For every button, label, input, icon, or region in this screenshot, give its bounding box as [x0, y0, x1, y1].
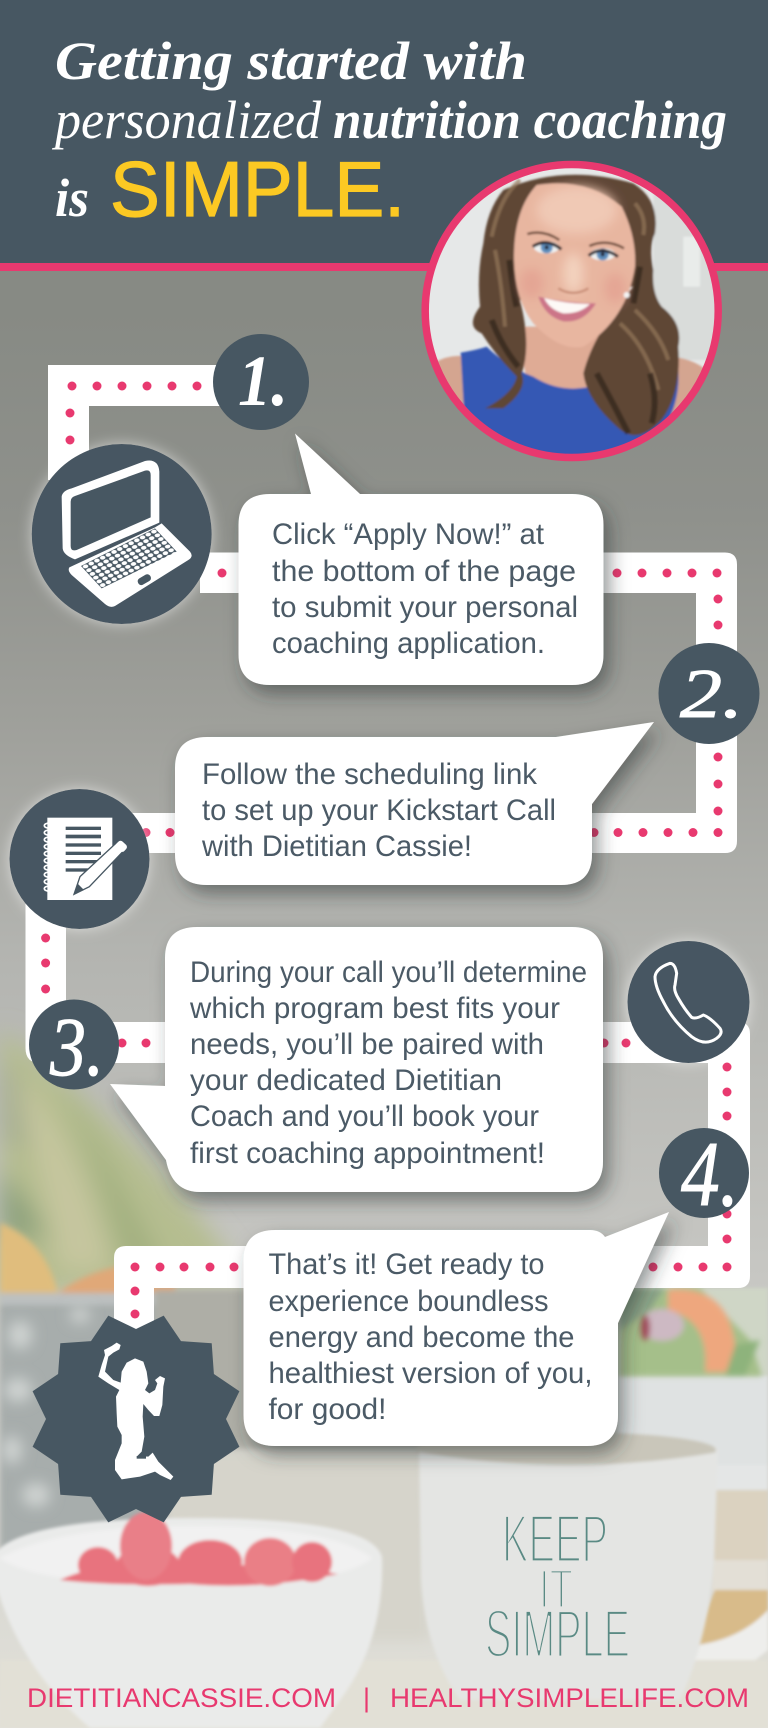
- title: is: [55, 168, 89, 228]
- portrait ring: [425, 164, 718, 458]
- dress: [461, 347, 679, 460]
- blurred oranges and grey bowl: [0, 1223, 445, 1568]
- speech bubble: step 1: [238, 434, 604, 685]
- title: Getting started with: [55, 31, 527, 91]
- mug lettering: [485, 1501, 630, 1672]
- number badge 3: 3.: [49, 1001, 104, 1094]
- speech bubble: step 4: experience boundless: [268, 1285, 548, 1318]
- speech bubble: step 2: Follow the scheduling link: [202, 758, 537, 791]
- speech bubble: step 4: healthiest version of you,: [268, 1357, 592, 1390]
- dotted path segment: step 4: [114, 1022, 750, 1345]
- neck: [523, 325, 599, 390]
- speech bubble: step 4: for good!: [268, 1393, 386, 1426]
- speech bubble: step 1: the bottom of the page: [272, 555, 576, 588]
- speech bubble: step 2: [175, 722, 654, 885]
- blurred salad: [620, 1287, 762, 1376]
- speech bubble: step 3: which program best fits your: [189, 992, 560, 1025]
- mug lettering: IT: [539, 1557, 573, 1620]
- shoulders: [433, 356, 710, 427]
- speech bubble: step 4: [244, 1212, 669, 1446]
- mug lettering: KEEP: [502, 1501, 608, 1577]
- speech bubble: step 1: Click “Apply Now!” at: [272, 518, 544, 551]
- number badge 2: [658, 643, 760, 744]
- blurred bananas: [0, 1030, 250, 1295]
- nose shadow: [558, 288, 588, 293]
- title: nutrition coaching: [333, 90, 727, 150]
- speech bubble: step 3: [110, 927, 603, 1192]
- speech bubble: step 1: coaching application.: [272, 627, 545, 660]
- footer websites: [27, 1683, 749, 1713]
- brows: [527, 233, 624, 248]
- smile: [538, 297, 596, 322]
- face: [514, 183, 635, 347]
- raspberries: [60, 1512, 338, 1586]
- dotted path segment: step 2: [130, 552, 737, 853]
- speech bubble: step 1: to submit your personal: [272, 591, 578, 624]
- dotted path segment: step 1: [48, 365, 225, 480]
- speech bubble: step 3: needs, you’ll be paired with: [190, 1028, 544, 1061]
- hair: [473, 175, 679, 435]
- mug: [416, 1432, 718, 1700]
- title: [51, 31, 727, 233]
- icon: laptop: [32, 444, 212, 624]
- title: SIMPLE.: [110, 145, 405, 233]
- speech bubble: step 4: energy and become the: [268, 1321, 574, 1354]
- header band: [0, 0, 768, 271]
- speech bubble: step 2: to set up your Kickstart Call: [202, 794, 556, 827]
- speech bubble: step 4: That’s it! Get ready to: [268, 1248, 544, 1281]
- eyes: [534, 241, 559, 253]
- pale wall right: [0, 1288, 768, 1728]
- mottled texture on grey bowl: [2, 1307, 90, 1507]
- bowl of raspberries: [0, 1512, 382, 1728]
- speech bubble: step 3: first coaching appointment!: [190, 1137, 545, 1170]
- footer websites: HEALTHYSIMPLELIFE.COM: [390, 1683, 749, 1713]
- icon: notepad and pencil: [10, 789, 150, 929]
- speech bubble: step 3: During your call you’ll determine: [190, 956, 587, 989]
- mug lettering: SIMPLE: [485, 1596, 630, 1672]
- speech bubble: step 2: with Dietitian Cassie!: [201, 830, 472, 863]
- icon: starburst with jumping woman: [33, 1316, 239, 1522]
- speech bubble: step 3: your dedicated Dietitian: [190, 1064, 502, 1097]
- pale table zone beside the mug: [165, 1452, 430, 1640]
- title: personalized: [51, 90, 322, 150]
- number badge 4: 4.: [681, 1123, 739, 1225]
- icon: telephone handset: [628, 941, 750, 1063]
- dotted path segment: step 3: [26, 900, 200, 1063]
- number badge 1: 1.: [238, 341, 288, 421]
- number badge 2: 2.: [680, 656, 743, 733]
- portrait of Dietitian Cassie: [424, 163, 727, 460]
- number badge 3: [29, 1000, 119, 1094]
- speech bubble: step 3: Coach and you’ll book your: [190, 1100, 539, 1133]
- footer websites: |: [363, 1683, 370, 1713]
- number badge 1: [213, 334, 309, 430]
- footer websites: DIETITIANCASSIE.COM: [27, 1683, 336, 1713]
